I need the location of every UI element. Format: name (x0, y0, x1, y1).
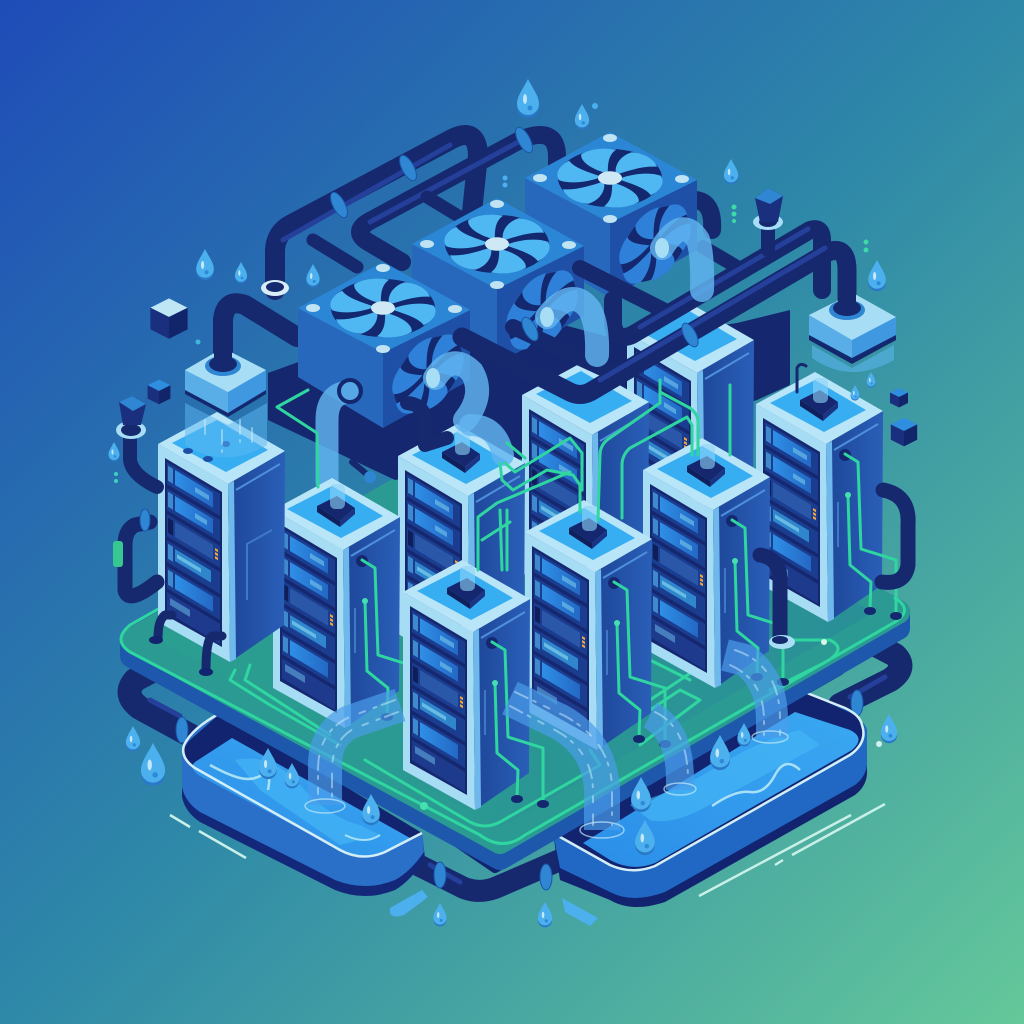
server rack back right (627, 301, 754, 551)
floating cubes (148, 298, 917, 446)
dark shadow layer under platform (190, 470, 840, 868)
server rack front (403, 560, 549, 810)
back coolant pipework (223, 125, 737, 360)
capped pipe and U pipe on left side (113, 340, 222, 676)
server rack far left (158, 412, 285, 662)
inlet connector left with cascading water (185, 342, 267, 458)
waterfall far right (725, 650, 788, 743)
server rack back centre (522, 363, 649, 613)
server rack centre front (525, 500, 671, 750)
server rack far right (756, 372, 902, 622)
pipe run across the racks (462, 229, 847, 394)
waterfall left (305, 700, 400, 813)
server rack right front (643, 438, 789, 688)
transparent coolant hoses from fan units (327, 229, 702, 483)
water droplets (108, 79, 897, 927)
left water tray (182, 712, 425, 896)
inlet connector right with dripping water (797, 285, 896, 401)
waterfall centre (510, 692, 624, 838)
waterfall right small (650, 712, 696, 795)
server rack back left (398, 424, 525, 674)
green circuit platform (121, 412, 904, 858)
lower coolant pipes beneath platform (130, 642, 900, 891)
side pipes on right (732, 188, 908, 649)
dark base under fan units (268, 300, 790, 480)
server rack second from left (273, 478, 419, 728)
right water tray (553, 693, 867, 907)
fan unit 3 (525, 132, 698, 309)
green signal cables over racks (277, 380, 730, 570)
puddle splashes at the bottom (390, 890, 598, 926)
fan unit 1 (298, 262, 471, 439)
fan unit 2 (412, 198, 585, 375)
motion lines (170, 804, 885, 896)
